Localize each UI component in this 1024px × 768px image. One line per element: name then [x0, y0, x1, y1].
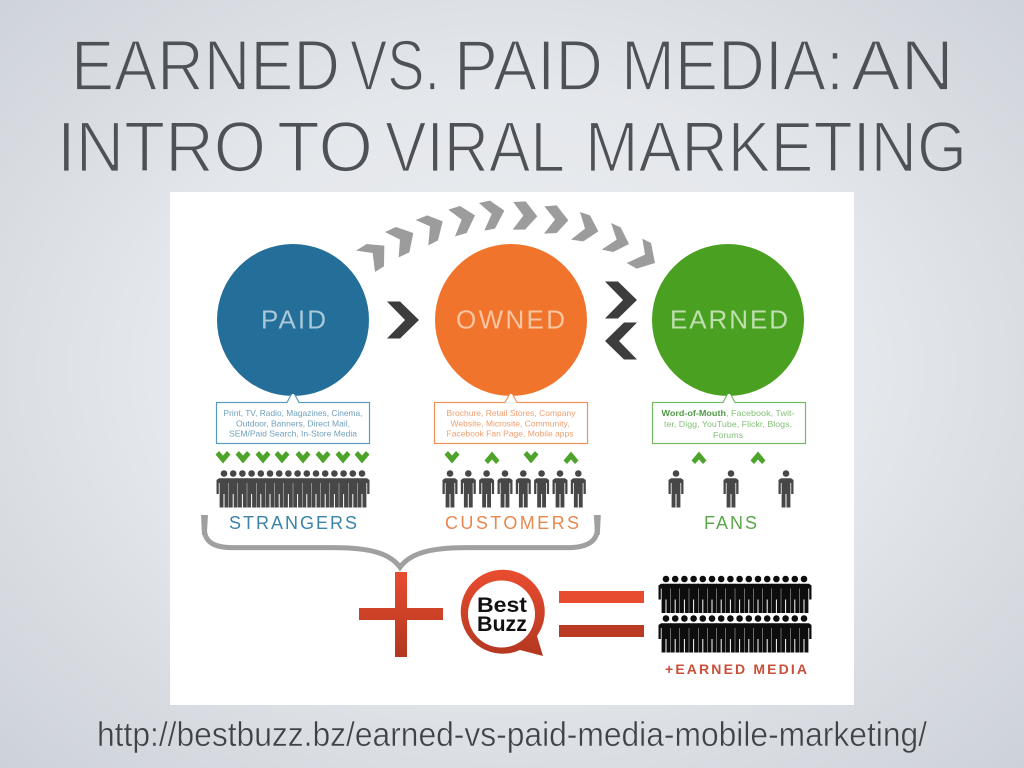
label: earned media: +EARNED MEDIA — [665, 661, 807, 677]
callout: paid channels: Outdoor, Banners, Direct Mail, — [236, 418, 350, 428]
title: INTRO — [57, 108, 266, 188]
label: customers: CUSTOMERS — [445, 513, 579, 533]
callout: earned channels: ter, Digg, YouTube, Flickr, Blogs, — [664, 419, 792, 429]
arrow: owned to earned — [605, 282, 637, 318]
title: EARNED — [71, 27, 340, 106]
title — [57, 27, 967, 188]
circle: earned — [652, 244, 804, 396]
icons: green down chevrons over strangers — [216, 451, 370, 464]
bracket — [201, 515, 601, 567]
title: VIRAL — [385, 108, 565, 188]
logo: Best Buzz: Buzz — [477, 612, 527, 636]
title: MEDIA: — [621, 27, 844, 106]
callout: owned channels: Facebook Fan Page, Mobile apps — [446, 428, 574, 438]
icon: plus — [359, 572, 443, 657]
arrow: paid to owned — [387, 302, 419, 338]
label: strangers: STRANGERS — [229, 513, 357, 533]
title: PAID — [454, 27, 603, 106]
callout: paid channels: Print, TV, Radio, Magazines, Cinema, — [224, 408, 362, 418]
callout: paid channels: SEM/Paid Search, In-Store Media — [229, 428, 357, 438]
circle: earned: EARNED — [670, 304, 788, 334]
circle: owned — [435, 244, 587, 396]
icons: fans — [668, 470, 794, 508]
callout: owned channels: Brochure, Retail Stores, Company — [446, 408, 576, 418]
circle: owned: OWNED — [456, 304, 565, 334]
icon: equals — [559, 591, 644, 637]
callout: earned channels — [652, 394, 806, 444]
title: AN — [851, 27, 954, 106]
panel: white diagram — [170, 192, 854, 705]
callout: earned channels: Forums — [713, 430, 743, 440]
label: fans: FANS — [704, 513, 757, 533]
icons: green up chevrons over fans — [692, 452, 766, 464]
source url: http://bestbuzz.bz/earned-vs-paid-media-mobile-marketing/ — [97, 716, 928, 754]
title: TO — [277, 108, 373, 188]
logo: Best Buzz — [461, 570, 545, 656]
callout: paid channels — [216, 394, 370, 444]
icons: customers — [442, 470, 586, 508]
title: VS. — [350, 27, 440, 106]
arrow: grey chevron arc from paid to earned — [356, 201, 655, 272]
icons: crowd of strangers — [216, 470, 370, 508]
arrow: earned to owned — [605, 322, 637, 360]
circle: paid: PAID — [261, 304, 326, 334]
logo: Best Buzz: Best — [477, 593, 527, 617]
icons: earned media crowd — [658, 576, 812, 652]
callout: owned channels: Website, Microsite, Community, — [450, 418, 570, 428]
title: MARKETING — [585, 108, 967, 188]
icons: green chevrons over customers — [444, 451, 578, 464]
circle: paid — [217, 244, 369, 396]
callout: owned channels — [434, 394, 588, 444]
callout: earned channels: Word-of-Mouth , Facebook, Twit- — [662, 408, 795, 418]
